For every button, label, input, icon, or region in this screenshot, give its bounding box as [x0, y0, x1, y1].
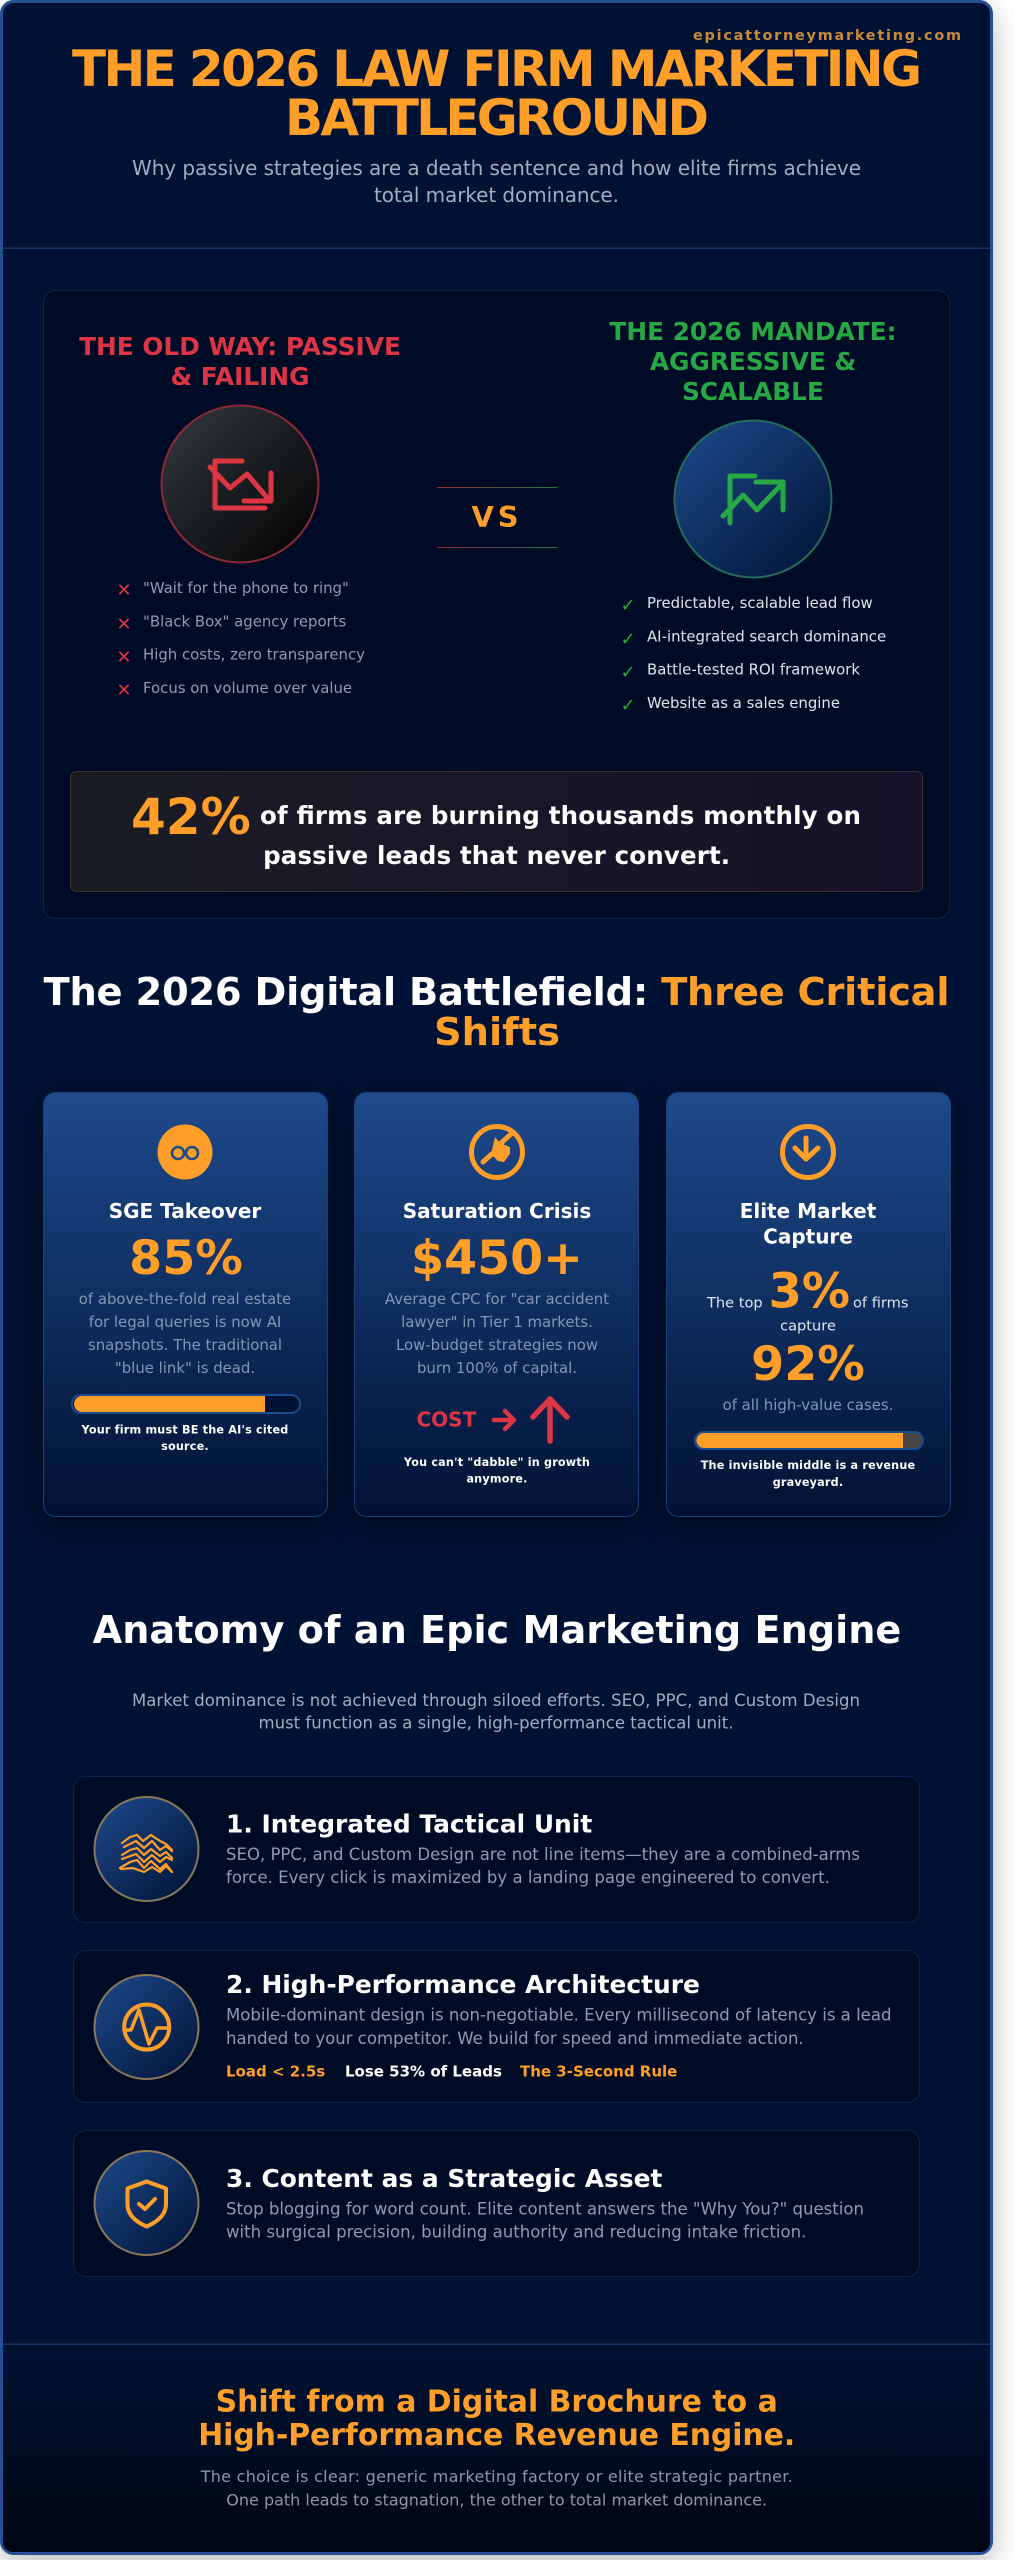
text: integrated description	[226, 1845, 860, 1887]
stat: top 3 percent: 3%	[768, 1264, 850, 1320]
list: mandate benefits: ✓	[620, 595, 636, 616]
list: mandate benefits: Battle-tested ROI framework	[647, 661, 860, 679]
subtitle	[132, 156, 861, 207]
caption: saturation: You can't "dabble" in growth	[403, 1456, 590, 1469]
heading: 2026 mandate: THE 2026 MANDATE:	[609, 317, 897, 346]
text: integrated description: SEO, PPC, and Custom Design are not line items—they are a combined-arms	[226, 1845, 860, 1864]
list: old way failures: "Wait for the phone to ring"	[143, 579, 349, 597]
text: architecture description: Mobile-dominant design is non-negotiable. Every millisecond of latency is a lead	[226, 2006, 891, 2025]
card: SGE takeover: 85%	[129, 1231, 243, 1286]
list: mandate benefits: ✓	[620, 662, 636, 683]
icon: pulse	[94, 1975, 198, 2079]
heading: 2026 mandate: AGGRESSIVE &	[650, 347, 856, 376]
footer heading: Shift from a Digital Brochure to a	[216, 2385, 778, 2420]
tags: speed stats: The 3-Second Rule	[520, 2063, 677, 2081]
list: mandate benefits: Website as a sales engine	[647, 694, 840, 712]
card: elite market capture: of all high-value cases.	[723, 1396, 893, 1414]
footer text: The choice is clear: generic marketing factory or elite strategic partner.	[200, 2467, 793, 2486]
footer text	[200, 2467, 793, 2510]
icon: declining chart	[162, 406, 318, 562]
list: old way failures: ✕	[116, 580, 132, 601]
list: old way failures	[116, 579, 365, 701]
caption: SGE	[81, 1423, 288, 1453]
card: SGE takeover	[44, 1092, 328, 1516]
panel: content as strategic asset	[74, 2130, 920, 2276]
title	[72, 40, 922, 147]
site url: epicattorneymarketing.com	[693, 28, 963, 44]
title: THE 2026 LAW FIRM MARKETING	[72, 40, 922, 98]
stat: top 3 percent: capture	[780, 1318, 836, 1335]
text: SGE description: for legal queries is now AI	[89, 1313, 281, 1331]
list: mandate benefits	[620, 594, 886, 716]
heading: digital battlefield: Shifts	[434, 1010, 560, 1055]
card: SGE takeover: SGE Takeover	[109, 1199, 261, 1223]
caption: saturation	[403, 1456, 590, 1486]
text: saturation description: Low-budget strategies now	[396, 1336, 598, 1354]
tags: speed stats: Lose 53% of Leads	[345, 2063, 502, 2081]
text: saturation description: lawyer" in Tier 1 markets.	[401, 1313, 593, 1331]
heading: old way: & FAILING	[171, 362, 309, 391]
callout: 42% statistic: of firms are burning thousands monthly on	[260, 801, 861, 830]
list: mandate benefits: AI-integrated search dominance	[647, 628, 886, 646]
text: anatomy intro	[132, 1691, 860, 1732]
heading: 2026 mandate	[609, 317, 897, 406]
list: mandate benefits: ✓	[620, 629, 636, 650]
text: architecture description	[226, 2006, 891, 2048]
icon: rising chart	[674, 420, 832, 578]
cost rising graphic: COST	[416, 1408, 477, 1432]
stat: top 3 percent	[706, 1264, 908, 1335]
heading: 2026 mandate: SCALABLE	[682, 377, 824, 406]
list: old way failures: ✕	[116, 680, 132, 701]
heading: digital battlefield	[44, 970, 950, 1055]
list: old way failures: Focus on volume over value	[143, 679, 352, 697]
cost rising graphic	[416, 1399, 567, 1441]
icon: mesh network	[94, 1797, 198, 1901]
text: integrated description: force. Every click is maximized by a landing page engineered to convert.	[226, 1868, 830, 1887]
list: old way failures: "Black Box" agency reports	[143, 612, 347, 630]
callout: 42% statistic: passive leads that never convert.	[263, 841, 730, 870]
text: SGE description: of above-the-fold real estate	[79, 1290, 291, 1308]
caption: SGE: source.	[161, 1440, 209, 1453]
panel: integrated tactical unit: 1. Integrated Tactical Unit	[226, 1810, 592, 1839]
text: content description: with surgical precision, building authority and reducing intake friction.	[226, 2223, 806, 2242]
card: elite market capture	[666, 1092, 950, 1516]
card: saturation crisis: Saturation Crisis	[403, 1199, 591, 1223]
heading: digital battlefield: The 2026 Digital Battlefield: Three Critical	[44, 970, 950, 1015]
panel: content as strategic asset: 3. Content as a Strategic Asset	[226, 2164, 663, 2193]
text: saturation description: burn 100% of capital.	[417, 1359, 577, 1377]
panel: integrated tactical unit	[74, 1776, 920, 1922]
list: old way failures: ✕	[116, 647, 132, 668]
text: anatomy intro: must function as a single, high-performance tactical unit.	[258, 1714, 734, 1732]
list: old way failures: High costs, zero transparency	[143, 646, 365, 664]
caption: SGE: Your firm must BE the AI's cited	[81, 1423, 288, 1436]
caption: saturation: anymore.	[466, 1473, 528, 1486]
card: saturation crisis: $450+	[411, 1231, 583, 1286]
subtitle: total market dominance.	[374, 183, 619, 207]
heading: elite: Capture	[763, 1224, 853, 1248]
tags: speed stats: Load < 2.5s	[226, 2063, 325, 2081]
title: BATTLEGROUND	[285, 89, 709, 147]
panel: old way vs 2026 mandate	[44, 290, 950, 918]
heading: old way	[79, 332, 401, 391]
panel: high-performance architecture: 2. High-Performance Architecture	[226, 1970, 700, 1999]
footer heading: High-Performance Revenue Engine.	[198, 2418, 795, 2453]
list: mandate benefits: ✓	[620, 695, 636, 716]
stat: top 3 percent: of firms	[853, 1295, 908, 1312]
heading: elite	[740, 1199, 877, 1248]
stat: top 3 percent: The top	[706, 1295, 763, 1312]
text: anatomy intro: Market dominance is not achieved through siloed efforts. SEO, PPC, and Custom Design	[132, 1691, 860, 1710]
callout: 42% statistic: 42%	[131, 788, 251, 846]
text: architecture description: handed to your competitor. We build for speed and immediate action.	[226, 2029, 804, 2048]
tags: speed stats	[226, 2063, 677, 2081]
text: saturation description: Average CPC for "car accident	[385, 1290, 609, 1308]
text: content description: Stop blogging for word count. Elite content answers the "Why You?" question	[226, 2200, 864, 2219]
text: SGE description	[79, 1290, 291, 1377]
list: old way failures: ✕	[116, 614, 132, 635]
text: content description	[226, 2200, 864, 2242]
vs divider	[437, 487, 557, 548]
footer heading	[198, 2385, 795, 2453]
heading: anatomy: Anatomy of an Epic Marketing Engine	[93, 1609, 901, 1653]
heading: elite: Elite Market	[740, 1199, 877, 1223]
icon: infinity	[158, 1124, 212, 1180]
text: SGE description: snapshots. The traditional	[88, 1336, 282, 1354]
vs divider: VS	[471, 500, 523, 534]
progress bar: 92%	[695, 1432, 923, 1449]
caption: elite: The invisible middle is a revenue	[701, 1459, 916, 1472]
footer text: One path leads to stagnation, the other to total market dominance.	[226, 2491, 767, 2510]
caption: elite	[701, 1459, 916, 1489]
icon: unplugged	[472, 1126, 522, 1178]
progress bar: 85%	[72, 1395, 300, 1413]
callout: 42% statistic	[70, 772, 922, 892]
card: elite market capture: 92%	[751, 1337, 865, 1392]
panel: high-performance architecture	[74, 1950, 920, 2102]
card: saturation crisis	[354, 1092, 638, 1516]
text: saturation description	[385, 1290, 609, 1377]
caption: elite: graveyard.	[773, 1476, 843, 1489]
icon: shield check	[94, 2151, 198, 2255]
text: SGE description: "blue link" is dead.	[115, 1359, 255, 1377]
list: mandate benefits: Predictable, scalable lead flow	[647, 594, 873, 612]
heading: old way: THE OLD WAY: PASSIVE	[79, 332, 401, 361]
subtitle: Why passive strategies are a death sentence and how elite firms achieve	[132, 156, 861, 180]
icon: arrow down circle	[782, 1126, 834, 1178]
